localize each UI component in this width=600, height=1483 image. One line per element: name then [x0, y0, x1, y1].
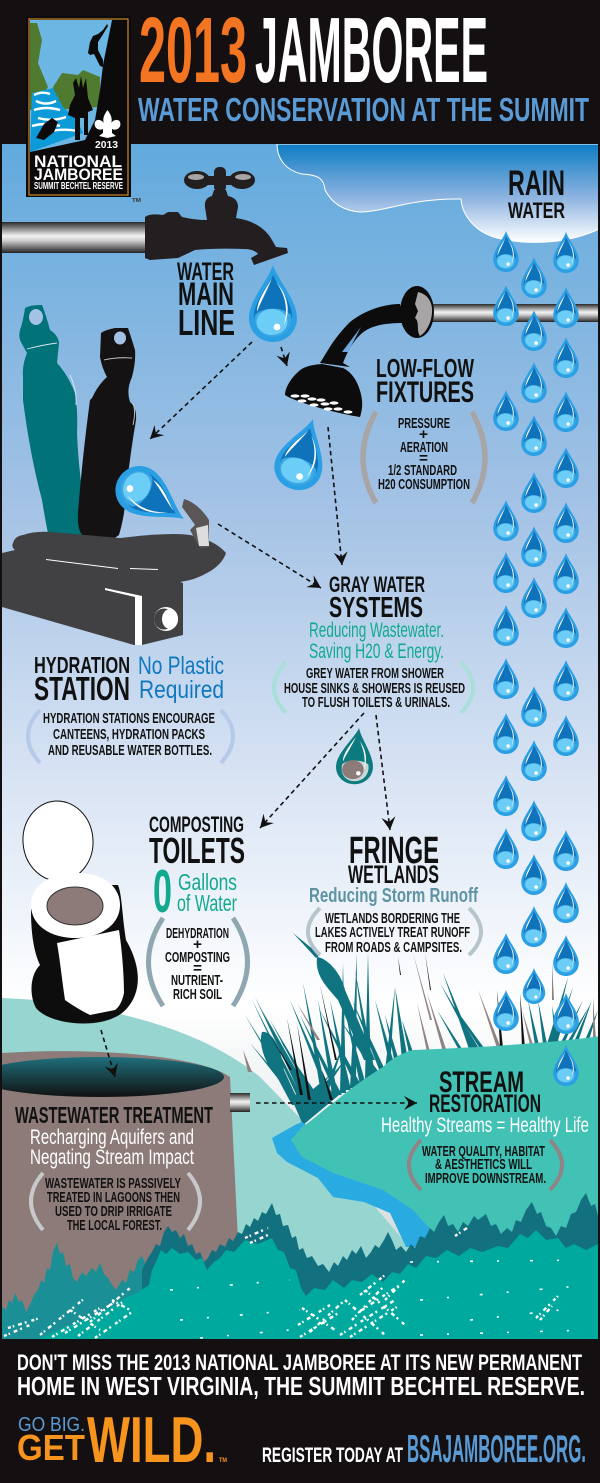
low-flow brackets and formula: =	[419, 451, 428, 467]
wetlands description: LAKES ACTIVELY TREAT RUNOFF	[315, 925, 470, 941]
hydration station heading: STATION	[34, 670, 130, 707]
icon: composting toilet	[20, 798, 138, 1024]
gray water description: TO FLUSH TOILETS & URINALS.	[302, 695, 450, 711]
icon: fountain water drop	[106, 457, 197, 539]
national jamboree logo	[26, 16, 141, 204]
wastewater heading	[15, 1102, 213, 1169]
gray water description	[274, 662, 473, 713]
hydration station heading: No Plastic	[138, 652, 224, 680]
composting toilets heading: of Water	[177, 890, 237, 916]
rain drops	[493, 231, 579, 1034]
gray water description: GREY WATER FROM SHOWER	[306, 666, 444, 682]
wastewater description: WASTEWATER IS PASSIVELY	[45, 1176, 181, 1192]
hydration description: AND REUSABLE WATER BOTTLES.	[48, 743, 212, 759]
water main line heading: WATER	[177, 258, 234, 286]
low-flow fixtures heading	[376, 353, 474, 409]
wastewater description	[31, 1173, 200, 1234]
wastewater description: USED TO DRIP IRRIGATE	[55, 1204, 172, 1220]
gray water systems heading: GRAY WATER	[329, 572, 425, 597]
stream restoration description: & AESTHETICS WILL	[435, 1157, 532, 1173]
footer band	[0, 1339, 600, 1483]
dashed flow arrows	[150, 342, 390, 830]
icon: hydration station fountain	[2, 499, 226, 645]
national jamboree logo: JAMBOREE	[34, 165, 123, 184]
low-flow fixtures heading: LOW-FLOW	[376, 353, 474, 383]
register call to action	[262, 1428, 586, 1471]
low-flow brackets and formula: PRESSURE	[398, 416, 450, 432]
water main line heading	[177, 258, 235, 343]
wetlands description: FROM ROADS & CAMPSITES.	[325, 940, 462, 956]
composting toilets heading: 0	[153, 858, 172, 925]
composting toilets heading	[149, 812, 245, 925]
go big get wild logo: GET	[17, 1427, 85, 1468]
hydration station heading: HYDRATION	[34, 652, 130, 678]
composting description	[148, 918, 248, 1006]
water main pipe	[2, 222, 147, 253]
icon: shower head	[285, 286, 434, 417]
national jamboree logo: 2013	[95, 140, 118, 151]
wastewater description: THE LOCAL FOREST.	[67, 1218, 162, 1234]
rain water heading: WATER	[508, 198, 565, 223]
hydration station heading: Required	[139, 676, 224, 704]
wastewater description: TREATED IN LAGOONS THEN	[47, 1190, 180, 1206]
hydration description	[28, 710, 233, 763]
icon: falling drop	[269, 412, 336, 496]
footer headline	[17, 1350, 585, 1401]
composting toilets heading: TOILETS	[149, 830, 245, 871]
shower pipe	[432, 304, 600, 322]
composting description: +	[193, 937, 202, 953]
go big get wild logo: TM	[219, 1458, 227, 1464]
stream	[272, 1122, 438, 1247]
light hill	[2, 998, 420, 1339]
header band	[0, 0, 600, 144]
wetlands description	[308, 908, 481, 956]
right teal hill	[291, 1036, 600, 1240]
fringe wetlands heading: WETLANDS	[348, 861, 439, 889]
icon: teal bottle	[19, 305, 96, 550]
register call to action: REGISTER TODAY AT	[262, 1444, 403, 1467]
composting description: DEHYDRATION	[166, 926, 229, 942]
wastewater heading: WASTEWATER TREATMENT	[15, 1102, 213, 1128]
composting toilets heading: Gallons	[178, 869, 237, 895]
national jamboree logo: TM	[132, 198, 141, 204]
hydration station heading	[34, 652, 224, 707]
stream restoration heading	[381, 1066, 589, 1137]
gray water systems heading: SYSTEMS	[329, 592, 423, 624]
fringe wetlands heading: FRINGE	[349, 830, 439, 872]
fringe wetlands heading: Reducing Storm Runoff	[309, 885, 478, 907]
go big get wild logo: WILD.	[87, 1403, 216, 1476]
lone raindrop on the hill	[553, 1045, 579, 1086]
wetlands description: WETLANDS BORDERING THE	[325, 911, 460, 927]
low-flow brackets and formula: H20 CONSUMPTION	[378, 477, 470, 493]
low-flow brackets and formula: AERATION	[400, 440, 448, 456]
forest	[2, 1193, 598, 1339]
hydration description: CANTEENS, HYDRATION PACKS	[53, 727, 205, 743]
stream restoration heading: STREAM	[439, 1066, 524, 1099]
gray water description: HOUSE SINKS & SHOWERS IS REUSED	[284, 681, 465, 697]
composting description: NUTRIENT-	[171, 973, 223, 989]
gray water systems heading: Saving H20 & Energy.	[309, 640, 444, 663]
national jamboree logo: SUMMIT BECHTEL RESERVE	[34, 181, 123, 192]
icon: black bottle	[78, 328, 136, 540]
fringe wetlands heading	[309, 830, 478, 907]
stream restoration description	[409, 1140, 562, 1190]
low-flow brackets and formula: +	[419, 427, 428, 443]
water main line heading: LINE	[178, 302, 235, 343]
composting description: COMPOSTING	[165, 950, 230, 966]
wastewater heading: Negating Stream Impact	[30, 1146, 194, 1169]
low-flow brackets and formula: 1/2 STANDARD	[388, 463, 457, 479]
wastewater heading: Recharging Aquifers and	[30, 1126, 194, 1149]
rain water heading	[508, 164, 565, 223]
go big get wild logo	[17, 1403, 227, 1476]
wetland reeds	[243, 933, 598, 1125]
low-flow brackets and formula	[363, 412, 485, 503]
treatment and stream arrows	[101, 1030, 417, 1103]
icon: wastewater tank	[0, 1050, 250, 1339]
composting toilets heading: COMPOSTING	[149, 812, 244, 837]
cloud	[277, 144, 599, 242]
rain water heading: RAIN	[508, 164, 565, 203]
national jamboree logo: NATIONAL	[34, 152, 122, 171]
icon: faucet	[145, 167, 288, 265]
title: 2013	[139, 0, 247, 102]
hydration description: HYDRATION STATIONS ENCOURAGE	[43, 711, 215, 727]
go big get wild logo: GO BIG.	[18, 1414, 85, 1436]
gray water systems heading: Reducing Wastewater.	[309, 619, 444, 642]
composting description: =	[193, 961, 202, 977]
composting description: RICH SOIL	[173, 987, 222, 1003]
gray water systems heading	[309, 572, 444, 663]
title	[139, 0, 488, 102]
snow speckles	[4, 1228, 558, 1338]
icon: big water drop	[249, 265, 297, 342]
low-flow fixtures heading: FIXTURES	[376, 376, 474, 409]
icon: gray water drop	[336, 728, 373, 784]
water main line heading: MAIN	[178, 276, 234, 312]
